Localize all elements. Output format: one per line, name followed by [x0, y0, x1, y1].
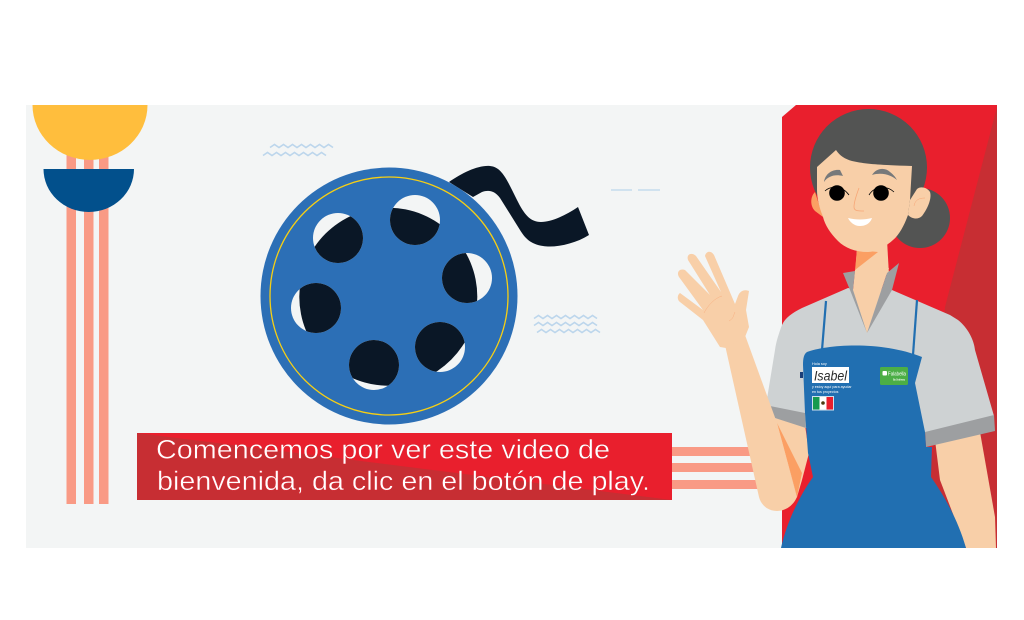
message banner	[137, 433, 672, 500]
reel disc	[260, 168, 518, 424]
short dashes decoration	[611, 189, 660, 191]
left ear	[811, 192, 823, 217]
name tag	[812, 362, 852, 410]
character: Isabel	[678, 109, 996, 548]
name tag: y estoy aquí para ayudar	[812, 385, 852, 389]
smile	[848, 218, 872, 226]
waving hand	[678, 252, 749, 348]
zigzag decoration top	[263, 144, 333, 156]
Falabella badge	[880, 367, 908, 385]
banner text: bienvenida, da clic en el botón de play.	[157, 466, 650, 496]
eyebrows	[824, 169, 897, 182]
film reel	[260, 166, 589, 425]
infographic scene	[26, 105, 997, 548]
film strip tail	[449, 166, 589, 247]
right ear	[908, 187, 931, 219]
forearm	[725, 335, 797, 511]
name tag: Isabel	[814, 368, 848, 384]
banner text: Comencemos por ver este video de	[156, 434, 610, 464]
neck	[855, 240, 889, 275]
right stripes behind arm	[672, 447, 762, 489]
hair	[810, 109, 927, 226]
left decorative stripes and semicircles	[32, 105, 148, 504]
Falabella badge: By Sodimac	[893, 378, 905, 382]
name tag: Hola soy	[812, 362, 827, 366]
face	[817, 150, 912, 252]
name tag: en tus proyectos	[812, 390, 839, 394]
zigzag decoration right of reel	[534, 316, 600, 332]
Falabella badge: Falabella	[888, 372, 906, 378]
nose	[854, 188, 864, 211]
reel holes	[291, 195, 492, 390]
apron straps	[822, 300, 917, 355]
open neckline skin	[853, 268, 889, 333]
collar	[843, 263, 899, 333]
upper left arm	[775, 418, 809, 497]
reel yellow ring	[270, 177, 508, 415]
shirt	[766, 288, 994, 433]
banner text	[156, 434, 650, 496]
right arm	[935, 432, 996, 548]
background panel	[26, 105, 997, 548]
sleeve cuffs	[770, 406, 995, 447]
red panel	[782, 105, 997, 548]
apron fold mark	[800, 372, 803, 378]
eyes	[825, 185, 894, 201]
hair bun	[890, 188, 950, 248]
flag of Mexico	[812, 396, 834, 410]
apron	[781, 346, 966, 548]
